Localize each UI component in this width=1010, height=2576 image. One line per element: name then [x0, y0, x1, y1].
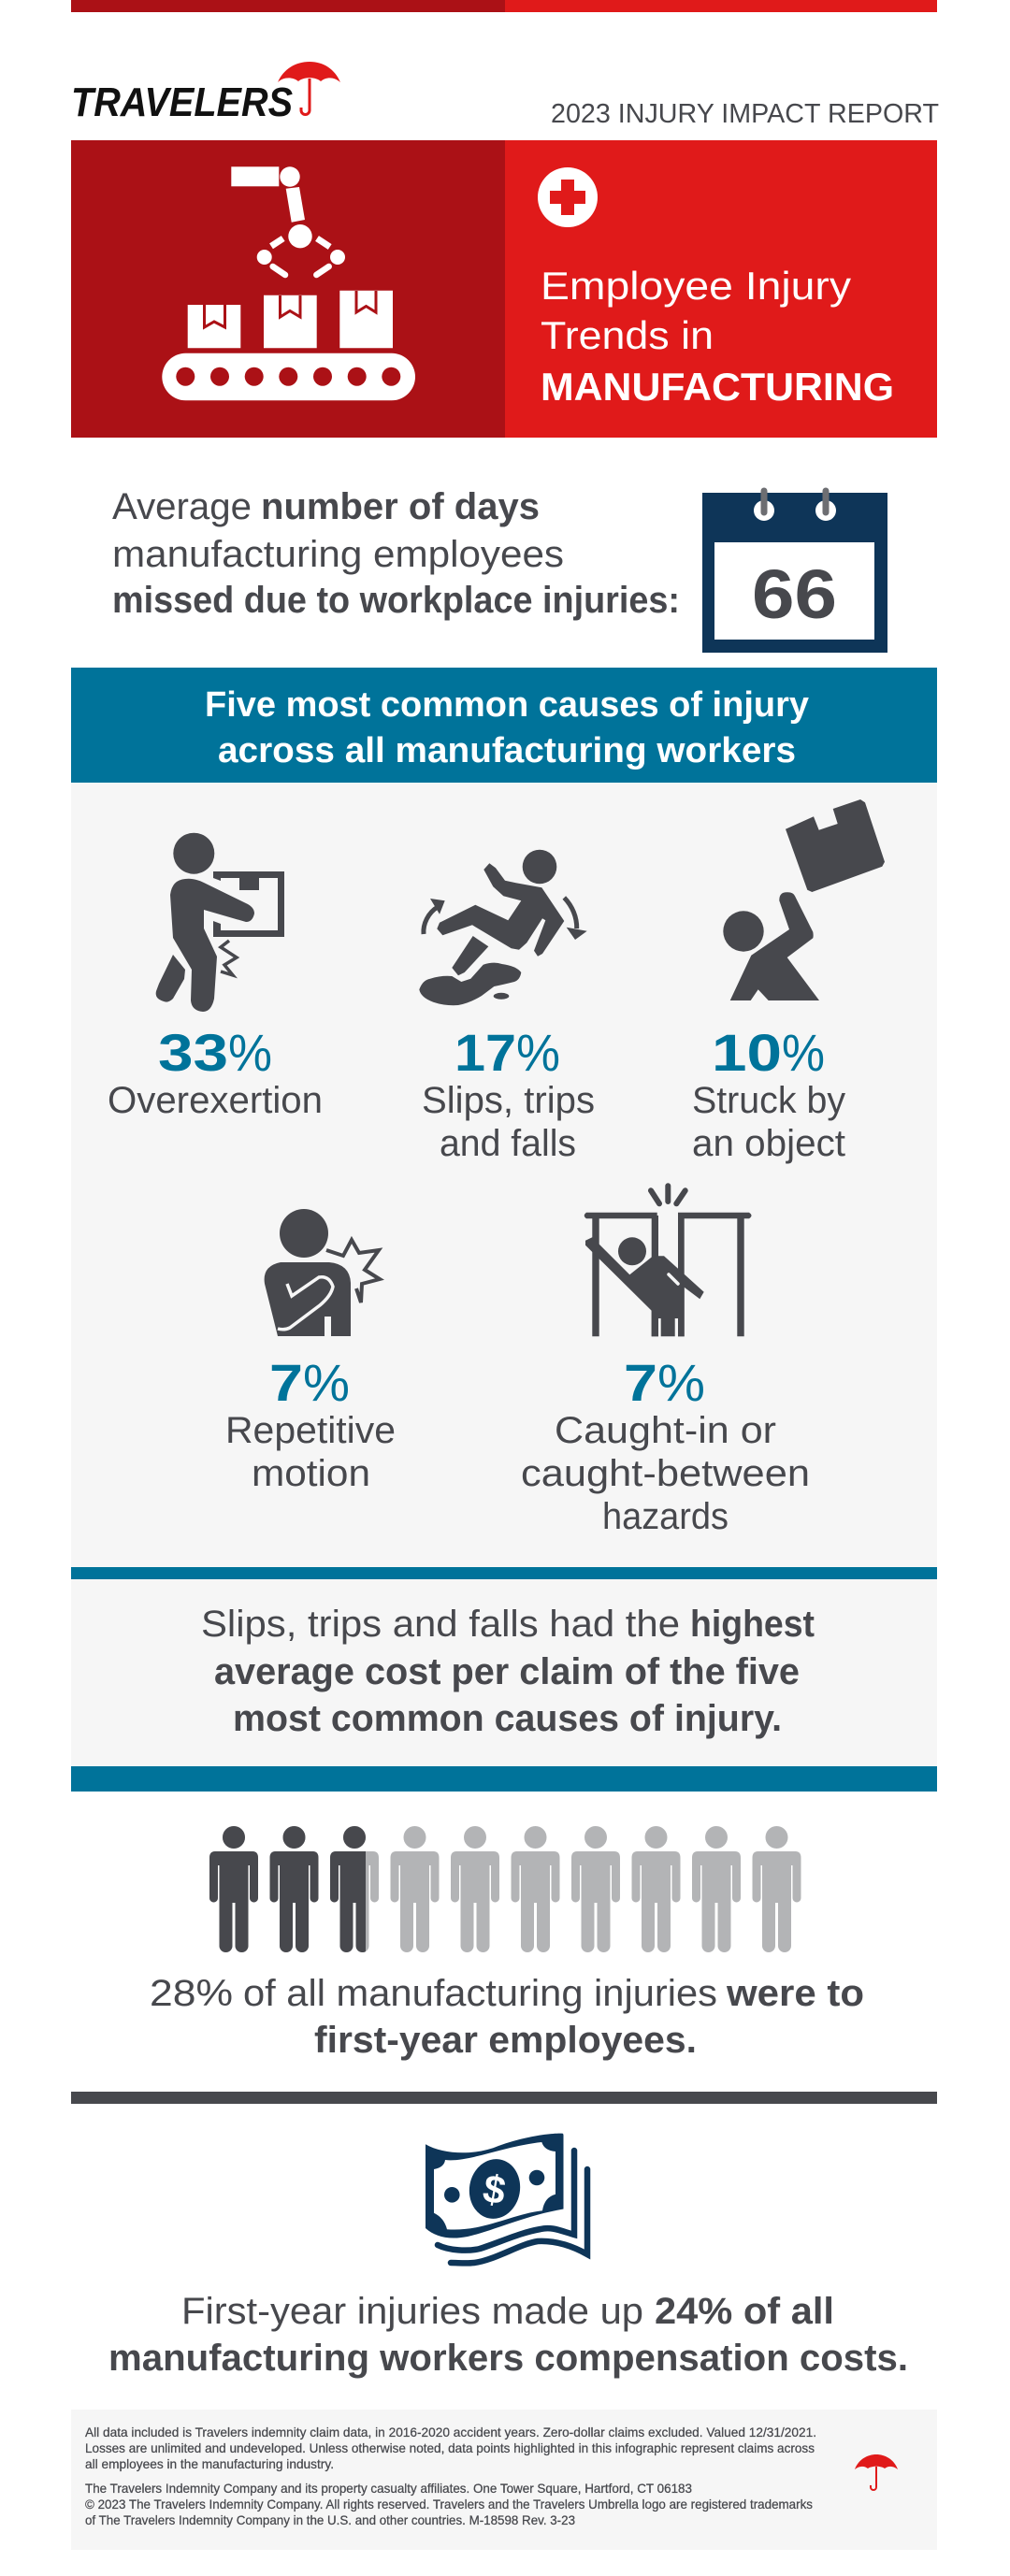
stat: 7% caught-in: %	[657, 1353, 705, 1412]
stat: 10% struck: Struck by	[692, 1080, 845, 1121]
text: first-year share of injuries: were to	[726, 1973, 864, 2014]
panel: footer disclaimer: All data included is Travelers indemnity claim data, in 2016-2020 accident years. Zero-dollar claims excluded. Valued 12/31/2021.	[85, 2425, 816, 2439]
text: first-year compensation costs: manufacturing workers compensation costs.	[108, 2338, 908, 2379]
stat: 7% repetitive: 7	[269, 1353, 303, 1412]
panel: cost per claim callout: most common causes of injury.	[233, 1698, 782, 1739]
banner title: Employee Injury	[541, 264, 851, 308]
icon: caught-in hazard	[584, 1186, 752, 1336]
panel: cost per claim callout	[71, 1579, 937, 1766]
icon: medical cross	[538, 167, 598, 227]
panel: footer disclaimer: © 2023 The Travelers Indemnity Company. All rights reserved. Travelers and the Travelers Umbrella logo are registered trademarks	[85, 2497, 813, 2511]
stat: 7% repetitive: %	[303, 1353, 350, 1412]
stat: 10% struck: 10	[712, 1023, 782, 1082]
icon: calendar 66	[702, 491, 887, 653]
stat: 10% struck: an object	[692, 1123, 845, 1164]
heading band: five most common causes: Five most common causes of injury	[205, 685, 809, 725]
icon: small umbrella	[855, 2454, 898, 2490]
icon: slips, trips and falls	[419, 850, 587, 1005]
stat: 17% slips: 17	[454, 1023, 516, 1082]
stat: 33% overexertion	[108, 1023, 323, 1121]
logo: Travelers: TRAVELERS	[71, 79, 293, 125]
icon: robot arm and conveyor	[162, 166, 415, 400]
text: first-year share of injuries: first-year employees.	[314, 2020, 697, 2061]
stat: 7% repetitive: motion	[252, 1453, 370, 1494]
heading band: five most common causes	[71, 668, 937, 783]
text: average days missed: missed due to workplace injuries:	[112, 580, 680, 621]
panel: header banner	[71, 140, 937, 438]
panel: cost per claim callout: highest	[690, 1604, 815, 1645]
icon: overexertion	[156, 833, 284, 1012]
stat: 10% struck	[692, 1023, 845, 1164]
banner title	[541, 264, 894, 409]
panel: footer disclaimer: Losses are unlimited and undeveloped. Unless otherwise noted, data points highlighted in this infographic represent claims across	[85, 2440, 815, 2455]
stat: 33% overexertion: Overexertion	[108, 1080, 323, 1121]
text: average days missed: Average	[112, 486, 252, 527]
text: average days missed: number of days	[261, 486, 540, 527]
panel: footer disclaimer: all employees in the manufacturing industry.	[85, 2456, 334, 2471]
text: first-year share of injuries: 28%	[150, 1973, 233, 2014]
panel: cost per claim callout: Slips, trips and falls had the	[201, 1604, 680, 1645]
stat: 7% caught-in: caught-between	[521, 1453, 810, 1494]
panel: cost per claim callout: average cost per claim of the five	[214, 1651, 800, 1692]
text: first-year share of injuries: of all manufacturing injuries	[243, 1973, 717, 2014]
text: first-year share of injuries	[150, 1973, 864, 2061]
text: average days missed	[112, 486, 680, 621]
top colour band	[71, 0, 937, 12]
stat: 7% caught-in: 7	[624, 1353, 657, 1412]
heading band: five most common causes: across all manufacturing workers	[218, 731, 796, 770]
icon: stack of money: $	[480, 2166, 509, 2213]
icon: calendar 66: 66	[752, 555, 837, 633]
stat: 33% overexertion: 33	[158, 1023, 228, 1082]
stat: 7% caught-in: Caught-in or	[555, 1410, 776, 1451]
stat: 7% caught-in	[521, 1353, 810, 1537]
icon: repetitive motion	[265, 1209, 380, 1336]
pictogram: 28% of ten people	[209, 1826, 801, 1952]
stat: 17% slips	[422, 1023, 595, 1164]
stat: 17% slips: and falls	[440, 1123, 576, 1164]
text: first-year compensation costs	[108, 2291, 908, 2379]
banner title: MANUFACTURING	[541, 365, 894, 409]
stat: 7% caught-in: hazards	[602, 1496, 729, 1537]
stat: 33% overexertion: %	[228, 1023, 272, 1082]
panel: footer disclaimer	[71, 2410, 937, 2550]
stat: 17% slips: Slips, trips	[422, 1080, 595, 1121]
stat: 7% repetitive: Repetitive	[225, 1410, 396, 1451]
icon: struck by an object	[723, 799, 885, 1000]
logo: Travelers	[71, 62, 340, 125]
stat: 10% struck: %	[782, 1023, 825, 1082]
text: first-year compensation costs: First-year injuries made up	[181, 2291, 643, 2332]
icon: stack of money	[426, 2134, 587, 2263]
panel: causes of injury	[71, 783, 937, 1567]
text: average days missed: manufacturing employees	[112, 534, 564, 575]
report title: 2023 INJURY IMPACT REPORT	[551, 99, 939, 129]
text: first-year compensation costs: 24% of all	[655, 2291, 834, 2332]
banner title: Trends in	[541, 313, 714, 357]
stat: 17% slips: %	[516, 1023, 560, 1082]
stat: 7% repetitive	[225, 1353, 396, 1494]
panel: footer disclaimer: The Travelers Indemnity Company and its property casualty affiliates. One Tower Square, Hartford, CT 06183	[85, 2481, 692, 2496]
panel: footer disclaimer: of The Travelers Indemnity Company in the U.S. and other countries. M-18598 Rev. 3-23	[85, 2512, 575, 2527]
